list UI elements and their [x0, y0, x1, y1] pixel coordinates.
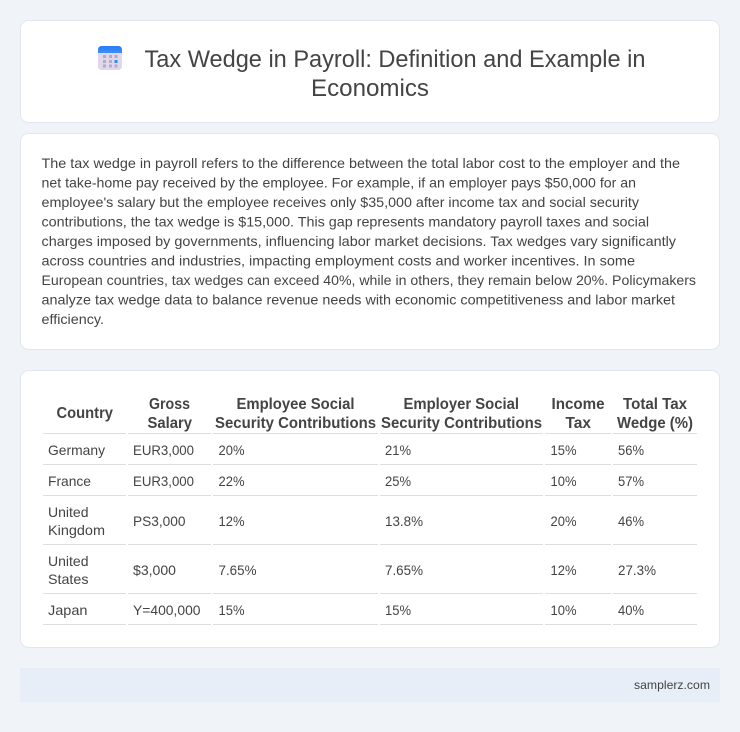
table row: Germany: Germany [48, 442, 105, 458]
table row: Japan: Japan [48, 602, 88, 618]
table row: Japan: 15% [218, 602, 244, 618]
table row: France: 25% [385, 473, 411, 489]
text block: tax wedge explanation: net take-home pay received by the employee. For example, if an employer pays $50,000 for an [42, 174, 636, 190]
table header row: Gross [149, 396, 190, 413]
table header row: Wedge (%) [617, 415, 693, 432]
title [144, 46, 646, 102]
panel: description [20, 134, 720, 350]
table row: United Kingdom: Kingdom [48, 522, 105, 538]
title: Economics [311, 75, 429, 102]
table header row: Income [552, 396, 605, 413]
table row: France [43, 473, 697, 496]
text block: tax wedge explanation: The tax wedge in payroll refers to the difference between the total labor cost to the employer and the [42, 155, 680, 171]
text block: tax wedge explanation: charges imposed by governments, influencing labor market decisions. Tax wedges vary significantly [42, 233, 676, 249]
table row: Germany: 21% [385, 442, 411, 458]
table row: United Kingdom: 13.8% [385, 513, 423, 529]
table row: United Kingdom: 12% [218, 513, 244, 529]
table row: United Kingdom [43, 504, 697, 545]
table row: France: 10% [550, 473, 576, 489]
text block: tax wedge explanation: across countries and industries, impacting employment costs and worker incentives. In some [42, 252, 635, 268]
footer [20, 668, 720, 702]
icon: calendar [98, 46, 122, 70]
table row: Japan: 15% [385, 602, 411, 618]
table row: Japan: Y=400,000 [133, 602, 201, 618]
table row: United States: 27.3% [618, 562, 656, 578]
table row: United States: States [48, 571, 88, 587]
title: Tax Wedge in Payroll: Definition and Example in [144, 46, 646, 73]
table header row: Total Tax [623, 396, 687, 413]
text block: tax wedge explanation: efficiency. [42, 311, 104, 327]
table row: United States: 12% [550, 562, 576, 578]
table row: Germany: EUR3,000 [133, 442, 194, 458]
table row: France: France [48, 473, 91, 489]
table row: France: 22% [218, 473, 244, 489]
table header row: Employee Social [236, 396, 354, 413]
panel: header [20, 20, 720, 122]
table row: United States: 7.65% [385, 562, 423, 578]
table row: United Kingdom: 46% [618, 513, 644, 529]
table row: United States: $3,000 [133, 562, 176, 578]
table row: France: 57% [618, 473, 644, 489]
table row: United States: United [48, 553, 88, 569]
table row: Japan: 10% [550, 602, 576, 618]
text block: tax wedge explanation [42, 155, 696, 327]
table header row: Salary [148, 415, 192, 432]
table header row [43, 396, 697, 434]
table row: Germany: 20% [218, 442, 244, 458]
table row: United Kingdom: United [48, 504, 88, 520]
table header row: Country [56, 405, 113, 422]
table row: United States [43, 553, 697, 594]
text block: tax wedge explanation: contributions, the tax wedge is $15,000. This gap represents mandatory payroll taxes and social [42, 214, 649, 230]
table row: United Kingdom: 20% [550, 513, 576, 529]
text block: tax wedge explanation: analyze tax wedge data to balance revenue needs with economic competitiveness and labor market [42, 292, 675, 308]
text block: tax wedge explanation: European countries, tax wedges can exceed 40%, while in others, they remain below 20%. Policymakers [42, 272, 696, 288]
table row: United Kingdom: PS3,000 [133, 513, 186, 529]
table row: Germany: 15% [550, 442, 576, 458]
text block: tax wedge explanation: employee's salary but the employee receives only $35,000 after income tax and social security [42, 194, 639, 210]
table header row: Employer Social [404, 396, 519, 413]
table header row: Security Contributions [215, 415, 376, 432]
table row: United States: 7.65% [218, 562, 256, 578]
table row: Germany: 56% [618, 442, 644, 458]
table row: Germany [43, 442, 697, 465]
table row: Japan [43, 602, 697, 625]
table header row: Security Contributions [381, 415, 542, 432]
panel: table [20, 370, 720, 648]
table row: Japan: 40% [618, 602, 644, 618]
table row: France: EUR3,000 [133, 473, 194, 489]
table header row: Tax [566, 415, 591, 432]
footer credit: samplerz.com [634, 678, 710, 692]
